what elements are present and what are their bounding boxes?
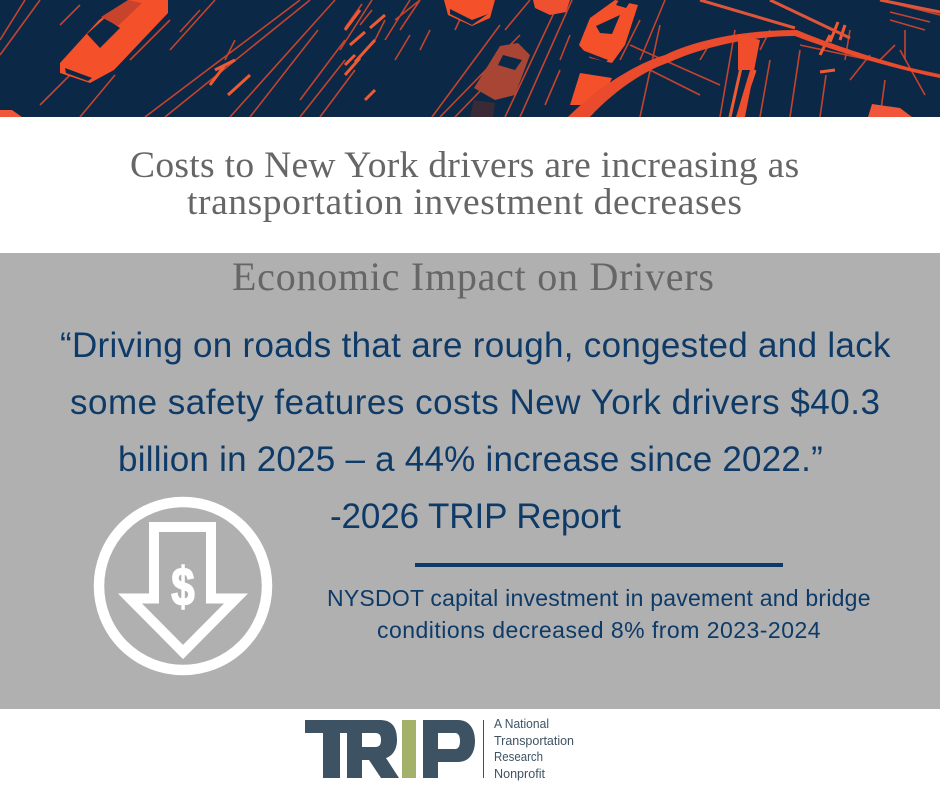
overpass arc	[568, 30, 940, 117]
heading: transportation investment decreases	[187, 182, 743, 223]
icon: dollar down arrow	[94, 496, 272, 676]
quote: “Driving on roads that are rough, congested and lack	[60, 326, 891, 365]
divider	[415, 563, 783, 567]
logo: TRIP: Nonprofit	[494, 766, 545, 781]
investment note: conditions decreased 8% from 2023-2024	[377, 617, 821, 643]
logo: TRIP: Research	[494, 749, 543, 764]
icon: dollar down arrow: $	[171, 557, 195, 617]
quote	[60, 326, 891, 536]
quote: some safety features costs New York drivers $40.3	[70, 383, 880, 422]
car: muted centre car	[470, 43, 530, 117]
car: large left car	[60, 0, 168, 83]
logo: TRIP: Transportation	[494, 733, 574, 748]
logo: TRIP	[305, 716, 574, 781]
investment note: NYSDOT capital investment in pavement and bridge	[327, 585, 871, 611]
heading: Costs to New York drivers are increasing as	[130, 145, 799, 186]
logo: TRIP: A National	[494, 716, 549, 731]
car: small top car	[533, 0, 570, 15]
subheading: Economic Impact on Drivers	[232, 254, 715, 299]
car: lower right corner car	[868, 104, 912, 117]
quote: -2026 TRIP Report	[330, 497, 621, 536]
quote: billion in 2025 – a 44% increase since 2022.”	[118, 440, 823, 479]
investment note	[327, 585, 871, 643]
banner: stylised traffic image	[0, 0, 940, 117]
car: bright right car	[579, 0, 638, 63]
car: top centre car	[444, 0, 495, 26]
car: lower centre car	[570, 73, 612, 105]
panel: economic impact	[0, 253, 940, 709]
heading	[130, 145, 799, 223]
